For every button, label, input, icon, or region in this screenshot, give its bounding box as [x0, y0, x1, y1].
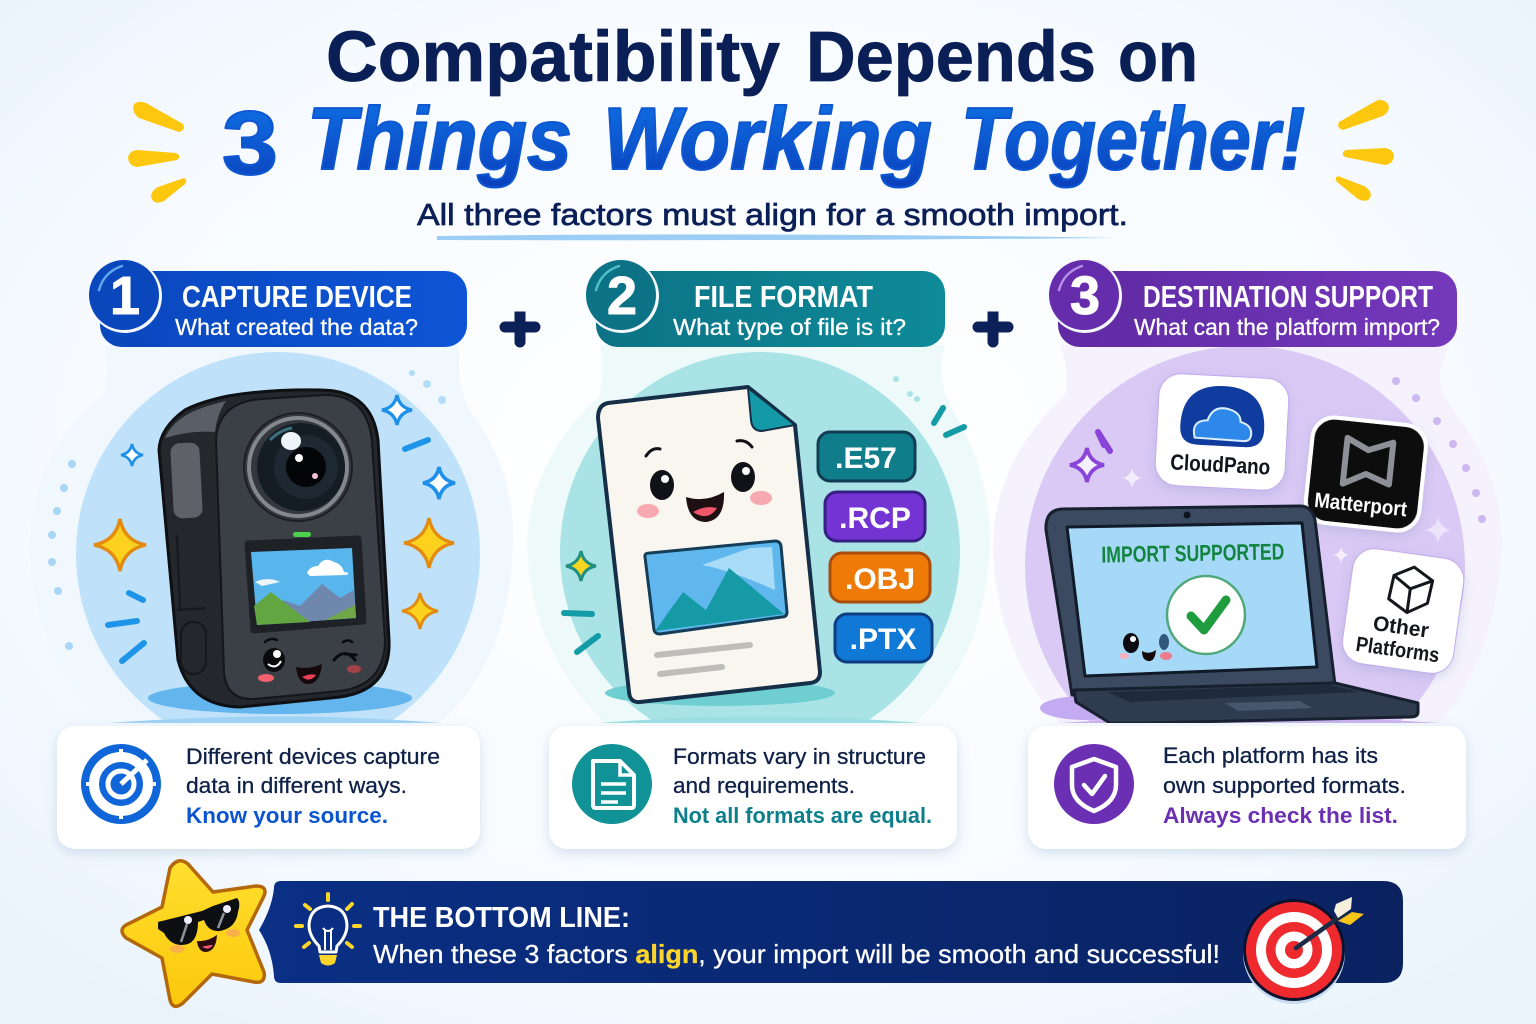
camera lens — [244, 413, 352, 521]
laptop — [1046, 506, 1418, 723]
text: bottom line: When these 3 factors align, your import will be smooth and successful! — [373, 939, 1220, 969]
card: cloudpano — [1154, 373, 1290, 491]
text: format note: and requirements. — [673, 773, 855, 798]
title: Things — [307, 89, 572, 188]
title: Compatibility — [326, 18, 781, 97]
icon: document — [572, 744, 652, 824]
text: device note — [186, 744, 440, 828]
text: device note: data in different ways. — [186, 773, 407, 798]
panel: file format — [527, 259, 990, 849]
sparkles — [1070, 432, 1451, 563]
banner: capture device — [88, 259, 467, 347]
card: cloudpano: CloudPano — [1170, 449, 1271, 480]
title: Depends — [806, 18, 1096, 97]
title: Together! — [961, 89, 1305, 188]
banner: destination support — [1048, 259, 1457, 347]
icon: light bulb — [296, 894, 360, 966]
format tags: .E57 — [835, 442, 897, 475]
status light — [293, 532, 311, 537]
banner: file format: FILE FORMAT — [694, 279, 873, 314]
illustration: file scene — [527, 345, 990, 752]
text: platform note: Always check the list. — [1163, 803, 1398, 828]
title: on — [1118, 18, 1198, 97]
format tags: .OBJ — [845, 563, 915, 596]
banner: file format — [585, 259, 945, 347]
title: 3 — [222, 94, 278, 194]
text: device note: Different devices capture — [186, 744, 440, 769]
title: Working — [603, 89, 932, 188]
text: bottom line — [373, 902, 1220, 969]
banner: destination support: DESTINATION SUPPORT — [1143, 279, 1433, 314]
card: other platforms: Platforms — [1354, 633, 1441, 667]
title — [222, 18, 1305, 194]
text: format note — [673, 744, 932, 828]
document lines — [657, 645, 750, 674]
camera screen — [248, 539, 363, 630]
document face — [637, 441, 772, 522]
laptop: IMPORT SUPPORTED — [1101, 538, 1285, 568]
banner: destination support: 3 — [1070, 266, 1100, 326]
document picture — [645, 541, 787, 634]
card: file format — [549, 726, 957, 849]
illustration: camera scene — [48, 345, 513, 723]
card: capture device — [57, 726, 480, 849]
banner: capture device: 1 — [110, 266, 140, 326]
text: bottom line: THE BOTTOM LINE: — [373, 902, 630, 934]
banner: destination support: What can the platform import? — [1134, 314, 1440, 340]
illustration: platforms scene — [993, 345, 1499, 723]
format tags: .PTX — [850, 623, 916, 656]
icon: star with sunglasses — [122, 861, 265, 1006]
format tags: .RCP — [839, 502, 911, 535]
banner: navy strip — [259, 881, 1403, 983]
panel: destination support — [993, 259, 1502, 849]
card: other platforms: Other — [1372, 612, 1430, 643]
camera body — [159, 390, 389, 707]
document — [598, 387, 820, 702]
card: other platforms — [1340, 546, 1467, 676]
banner: file format: 2 — [607, 266, 637, 326]
text: format note: Not all formats are equal. — [673, 803, 932, 828]
callout: bottom line — [122, 861, 1403, 1006]
text: device note: Know your source. — [186, 803, 388, 828]
card: matterport: Matterport — [1313, 489, 1408, 521]
icon: right burst — [1336, 100, 1394, 201]
banner: capture device: What created the data? — [175, 314, 418, 340]
panel: capture device — [30, 259, 513, 849]
sparkles — [564, 376, 964, 652]
icon: target — [81, 744, 161, 824]
banner: file format: What type of file is it? — [673, 314, 906, 340]
icon: target with arrow — [1243, 897, 1364, 1004]
card: matterport — [1304, 415, 1428, 533]
text: platform note: Each platform has its — [1163, 743, 1378, 768]
icon: left burst — [128, 102, 186, 203]
format tags — [818, 432, 932, 662]
card: destination support — [1028, 726, 1466, 849]
subtitle: All three factors must align for a smooth import. — [417, 197, 1128, 232]
icon: plus — [973, 312, 1013, 347]
text: format note: Formats vary in structure — [673, 744, 926, 769]
text: platform note: own supported formats. — [1163, 773, 1406, 798]
text: platform note — [1163, 743, 1406, 828]
icon: shield — [1054, 744, 1134, 824]
banner: capture device: CAPTURE DEVICE — [182, 279, 412, 314]
icon: plus — [500, 312, 540, 347]
camera face — [258, 639, 361, 684]
sparkles — [94, 395, 455, 661]
